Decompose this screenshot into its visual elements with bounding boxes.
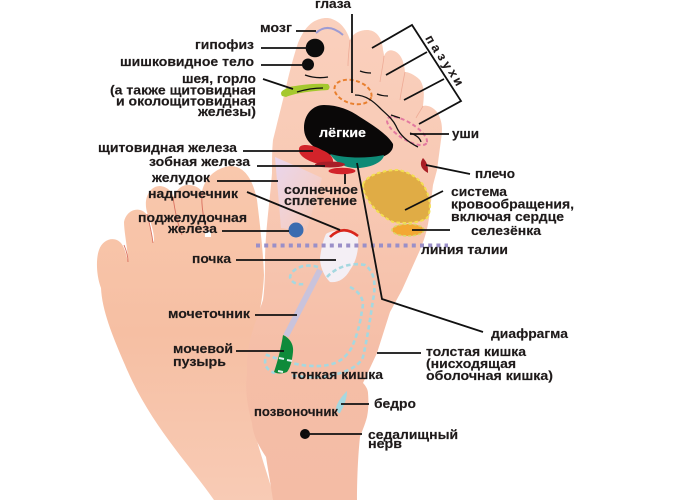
label: sciatic nerve: седалищный bbox=[368, 428, 458, 442]
zone: spleen bbox=[392, 224, 424, 236]
zone: lungs: лёгкие bbox=[319, 126, 366, 140]
eyes zone bbox=[332, 76, 374, 108]
zone: diaphragm band bbox=[330, 154, 384, 168]
label: stomach: желудок bbox=[151, 171, 211, 185]
label: sinuses: п bbox=[422, 33, 438, 46]
label: large intestine: (нисходящая bbox=[426, 357, 516, 371]
zone: neck, throat bbox=[281, 84, 330, 97]
label: pancreas: поджелудочная bbox=[138, 211, 247, 225]
label: solar plexus: сплетение bbox=[284, 194, 357, 208]
toe creases bbox=[124, 192, 208, 262]
label: circulatory system: кровообращения, bbox=[451, 198, 574, 212]
label: small intestine: тонкая кишка bbox=[291, 368, 384, 382]
label: circulatory system: система bbox=[451, 185, 508, 199]
zone: thyroid gland bbox=[299, 145, 333, 163]
sinuses bracket bbox=[372, 25, 461, 124]
label: spine: позвоночник bbox=[254, 405, 339, 419]
label: sinuses bbox=[422, 33, 466, 88]
label: large intestine: толстая кишка bbox=[426, 345, 527, 359]
label: circulatory system: включая сердце bbox=[451, 210, 564, 224]
waist line bbox=[256, 244, 448, 248]
label: waist line: линия талии bbox=[421, 243, 508, 257]
zone: shoulder bbox=[421, 158, 428, 173]
label: adrenal: надпочечник bbox=[148, 187, 239, 201]
zone: adrenal gland bbox=[330, 230, 358, 237]
label: kidney: почка bbox=[192, 252, 232, 266]
label: neck and throat bbox=[110, 72, 256, 119]
label: diaphragm: диафрагма bbox=[491, 327, 569, 341]
zone: pancreas bbox=[288, 222, 304, 238]
label: brain: мозг bbox=[260, 21, 292, 35]
label: large intestine bbox=[426, 345, 553, 383]
label: sinuses: х bbox=[445, 67, 461, 80]
label: solar plexus bbox=[284, 183, 358, 208]
label: thymus: зобная железа bbox=[149, 155, 251, 169]
lavender stomach area bbox=[275, 157, 322, 232]
label: pancreas bbox=[138, 211, 247, 236]
label: shoulder: плечо bbox=[475, 167, 515, 181]
toe creases bbox=[348, 40, 423, 118]
label: pancreas: железа bbox=[167, 222, 218, 236]
zone: stomach bbox=[328, 168, 356, 174]
ears zone bbox=[383, 112, 431, 150]
foot reflex lines bbox=[297, 71, 421, 147]
zone: lungs bbox=[304, 105, 393, 159]
label: ears: уши bbox=[452, 127, 479, 141]
label: large intestine: оболочная кишка) bbox=[426, 369, 553, 383]
label: circulatory system bbox=[451, 185, 574, 224]
label: solar plexus: солнечное bbox=[284, 183, 358, 197]
label: bladder: пузырь bbox=[173, 355, 226, 369]
label: sinuses: и bbox=[450, 75, 466, 88]
zone: intestines bbox=[265, 264, 374, 377]
label: sciatic nerve: нерв bbox=[368, 437, 402, 451]
zone: thymus gland bbox=[315, 162, 345, 168]
label: ureter: мочеточник bbox=[168, 307, 251, 321]
zone: ureter bbox=[286, 270, 320, 336]
label: sinuses: у bbox=[439, 59, 455, 72]
label: spleen: селезёнка bbox=[471, 224, 542, 238]
zone: bladder bbox=[274, 335, 293, 374]
label: sciatic nerve bbox=[368, 428, 458, 451]
zone: pineal body bbox=[302, 58, 314, 70]
label: neck and throat: железы) bbox=[197, 105, 256, 119]
label: hip: бедро bbox=[374, 397, 416, 411]
gap between toes bbox=[205, 231, 211, 237]
label: neck and throat: (а также щитовидная bbox=[110, 84, 256, 98]
label: neck and throat: и околощитовидная bbox=[116, 94, 256, 108]
label: neck and throat: шея, горло bbox=[182, 72, 256, 86]
label: sinuses: а bbox=[428, 42, 444, 55]
label: thyroid: щитовидная железа bbox=[98, 141, 238, 155]
zone: hip bbox=[336, 391, 347, 413]
leader lines bbox=[217, 14, 483, 434]
zone: pituitary gland bbox=[306, 39, 324, 57]
label: sinuses: з bbox=[434, 51, 450, 63]
left foot bbox=[97, 166, 275, 500]
label: bladder: мочевой bbox=[173, 342, 233, 356]
zone: sciatic nerve bbox=[300, 429, 310, 439]
label: pineal body: шишковидное тело bbox=[120, 55, 254, 69]
zone: kidney bbox=[320, 231, 358, 282]
label: bladder bbox=[173, 342, 233, 369]
right foot bbox=[246, 18, 442, 500]
label: pituitary: гипофиз bbox=[195, 38, 254, 52]
zone: circulatory system and heart bbox=[363, 170, 430, 223]
zone: brain bbox=[316, 28, 343, 35]
